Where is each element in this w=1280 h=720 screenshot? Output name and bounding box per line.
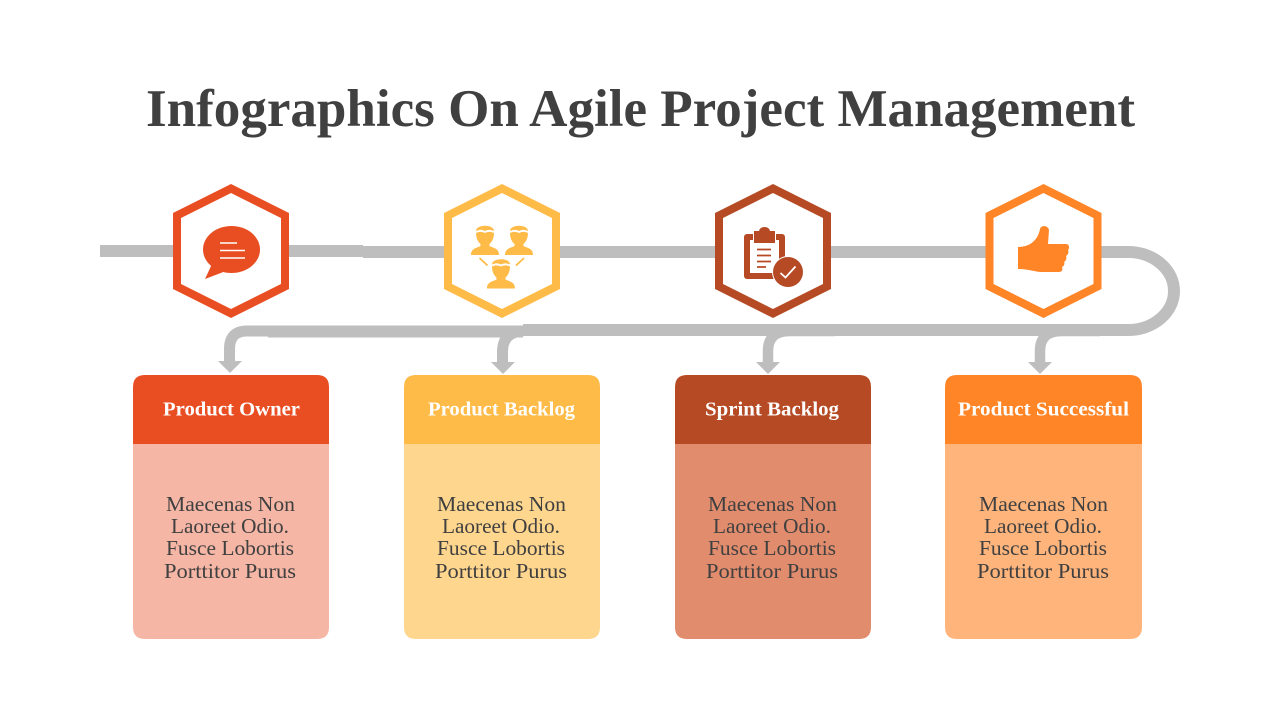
hexagon: product owner <box>177 188 285 314</box>
card text <box>164 492 296 583</box>
card text: Fusce Lobortis <box>166 536 294 560</box>
card text: Fusce Lobortis <box>979 536 1107 560</box>
title: Infographics On Agile Project Management <box>146 80 1135 138</box>
card text: Maecenas Non <box>979 492 1109 516</box>
card: sprint backlog <box>675 375 871 639</box>
card text: Fusce Lobortis <box>437 536 565 560</box>
card header <box>945 375 1142 444</box>
card text: Porttitor Purus <box>706 559 838 583</box>
card text: Porttitor Purus <box>164 559 296 583</box>
card: product backlog <box>404 375 600 639</box>
icon: clipboard with check <box>747 227 804 288</box>
icon: team of three people <box>471 226 533 288</box>
card header <box>404 375 600 444</box>
card text <box>706 492 838 583</box>
card header: Product Successful <box>958 398 1129 420</box>
icon: speech bubble <box>203 226 260 279</box>
card: product successful <box>945 375 1142 639</box>
card text: Maecenas Non <box>437 492 567 516</box>
card text: Maecenas Non <box>708 492 838 516</box>
card text: Laoreet Odio. <box>713 514 831 538</box>
card text: Fusce Lobortis <box>708 536 836 560</box>
card text: Porttitor Purus <box>977 559 1109 583</box>
hexagon: sprint backlog <box>719 188 827 314</box>
card text <box>977 492 1109 583</box>
connector: timeline with return curve and arrows <box>100 251 1174 374</box>
card text: Porttitor Purus <box>435 559 567 583</box>
icon: thumbs up <box>1018 226 1069 272</box>
card text: Maecenas Non <box>166 492 296 516</box>
card text: Laoreet Odio. <box>984 514 1102 538</box>
hexagon: product backlog <box>448 188 556 314</box>
card text: Laoreet Odio. <box>442 514 560 538</box>
card text: Laoreet Odio. <box>171 514 289 538</box>
card header: Product Owner <box>163 398 300 420</box>
hexagon: product successful <box>990 188 1098 314</box>
card header <box>133 375 329 444</box>
card header <box>675 375 871 444</box>
card header: Sprint Backlog <box>705 398 839 420</box>
card header: Product Backlog <box>428 398 575 420</box>
card text <box>435 492 567 583</box>
card: product owner <box>133 375 329 639</box>
